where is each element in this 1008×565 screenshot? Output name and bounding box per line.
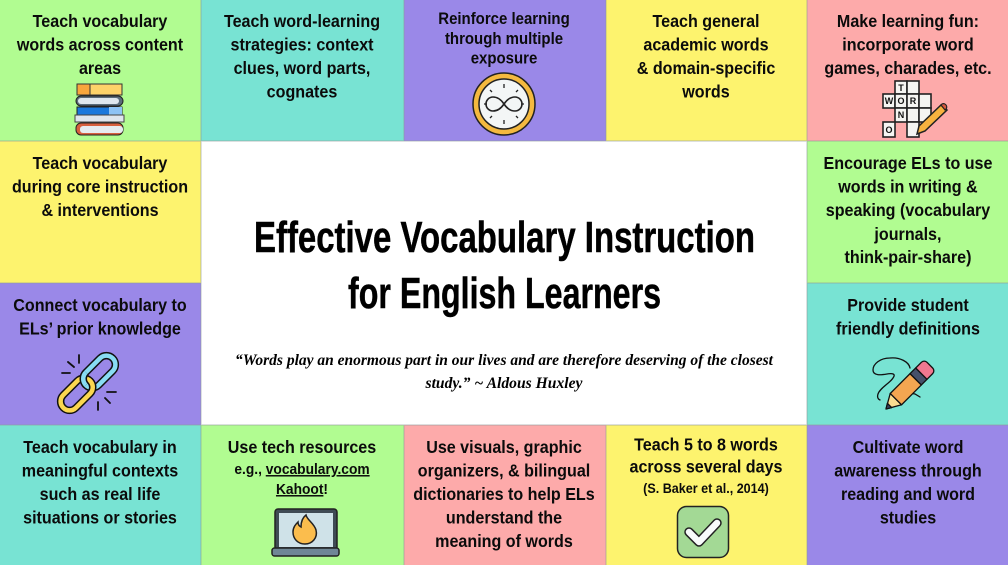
panel: word awareness: Cultivate word [853,437,963,457]
icon: crossword and pencil [883,81,947,137]
panel: meaningful contexts: Teach vocabulary in [23,437,177,457]
panel: word-learning strategies: cognates [267,82,337,102]
panel: meaningful contexts: such as real life [40,484,160,504]
panel: prior knowledge: Connect vocabulary to [13,295,187,315]
panel: encourage ELs [807,141,1008,283]
panel: word-learning strategies: Teach word-learning [224,11,380,31]
panel: reinforce through multiple exposure: exposure [471,50,538,68]
icon: crossword and pencil: O [897,96,905,106]
panel: center title [201,141,807,425]
panel: visuals and organizers: meaning of words [435,531,573,551]
icon: infinity clock [473,73,535,135]
icon: crossword and pencil: O [885,125,893,135]
panel: teach vocabulary across content areas: words across content [16,35,184,55]
panel: make learning fun: Make learning fun: [837,11,979,31]
panel: make learning fun: games, charades, etc. [824,58,992,78]
panel: reinforce through multiple exposure [404,0,606,141]
panel: visuals and organizers: dictionaries to help ELs [413,484,595,504]
panel: word awareness: reading and word [841,484,975,504]
icon: crossword and pencil: R [910,96,917,106]
panel: tech resources [201,425,404,565]
icon: stack of books [75,84,124,135]
quote: study.” ~ Aldous Huxley [425,375,583,392]
panel: core instruction: Teach vocabulary [33,153,168,173]
title: Effective Vocabulary Instruction [254,213,755,262]
panel: general academic words [606,0,807,141]
panel: 5 to 8 words [606,425,807,565]
panel: encourage ELs: think-pair-share) [845,247,971,267]
panel: encourage ELs: words in writing & [837,177,978,197]
panel: teach vocabulary across content areas: areas [79,58,121,78]
panel: prior knowledge: ELs’ prior knowledge [19,319,181,339]
panel: core instruction: & interventions [41,200,159,220]
panel: prior knowledge [0,283,201,425]
panel: visuals and organizers: Use visuals, graphic [426,437,582,457]
icon: laptop with flame [272,509,339,556]
panel: encourage ELs: Encourage ELs to use [824,153,992,173]
icon: pencil with squiggle [873,358,935,415]
panel: word-learning strategies: clues, word parts, [234,58,370,78]
panel: make learning fun [807,0,1008,141]
icon: crossword and pencil: T [898,83,904,93]
panel: word-learning strategies: strategies: context [231,35,374,55]
panel: general academic words: academic words [643,35,769,55]
panel: reinforce through multiple exposure: Reinforce learning [438,11,570,28]
panel: visuals and organizers: organizers, & bilingual [418,461,590,481]
quote [235,352,774,392]
panel: meaningful contexts [0,425,201,565]
title [254,213,755,318]
quote: “Words play an enormous part in our lives and are therefore deserving of the closest [235,352,774,369]
panel: core instruction: during core instruction [12,177,188,197]
panel: 5 to 8 words: (S. Baker et al., 2014) [643,481,769,496]
panel: student friendly definitions: friendly definitions [836,319,980,339]
panel: student friendly definitions [807,283,1008,425]
panel: teach vocabulary across content areas: Teach vocabulary [33,11,168,31]
icon: crossword and pencil: N [898,110,904,120]
panel: word awareness [807,425,1008,565]
panel: core instruction [0,141,201,283]
panel: general academic words: & domain-specific [637,58,775,78]
panel: 5 to 8 words: Teach 5 to 8 words [634,435,778,455]
panel: meaningful contexts: meaningful contexts [22,461,178,481]
panel: word awareness: studies [880,508,936,528]
panel: teach vocabulary across content areas [0,0,201,141]
panel: student friendly definitions: Provide student [847,295,969,315]
panel: reinforce through multiple exposure: through multiple [445,31,563,48]
panel: visuals and organizers: understand the [446,508,562,528]
panel: meaningful contexts: situations or stories [23,508,177,528]
panel: tech resources: Use tech resources [228,437,376,457]
panel: encourage ELs: speaking (vocabulary [826,200,991,220]
panel: word-learning strategies [201,0,404,141]
title: for English Learners [348,269,661,318]
panel: make learning fun: incorporate word [842,35,974,55]
panel: word awareness: awareness through [834,461,982,481]
panel: general academic words: words [681,82,730,102]
panel: encourage ELs: journals, [873,224,941,244]
panel: tech resources: e.g., vocabulary.com [234,462,370,478]
panel: visuals and organizers [404,425,606,565]
icon: check mark [678,506,728,558]
panel: general academic words: Teach general [653,11,759,31]
panel: tech resources: Kahoot! [276,482,328,498]
icon: crossword and pencil: W [885,96,894,106]
panel: 5 to 8 words: across several days [630,457,782,477]
icon: chain link [57,352,119,414]
